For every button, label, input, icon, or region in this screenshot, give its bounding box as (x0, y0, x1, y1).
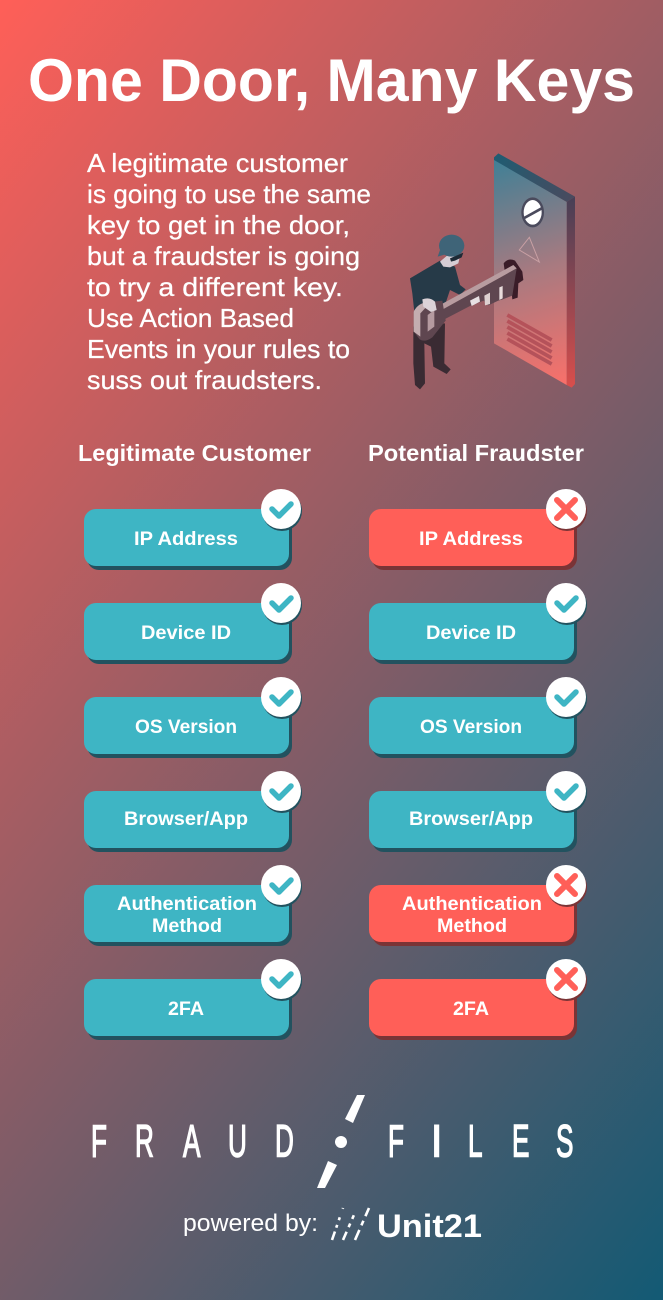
left row: Browser/App (84, 771, 302, 852)
left row: Authentication Method (84, 865, 302, 946)
intro text block: is going to use the same (87, 179, 371, 209)
left row: IP Address: IP Address (134, 529, 238, 550)
logo: Fraud Files: L (468, 1116, 483, 1166)
logo: Fraud Files: U (228, 1116, 247, 1166)
heading: Potential Fraudster: Potential Fraudster (368, 440, 584, 466)
intro text block: suss out fraudsters. (87, 365, 322, 395)
left row: Browser/App: Browser/App (124, 809, 248, 830)
heading: Legitimate Customer: Legitimate Customer (78, 440, 311, 466)
intro text block: Use Action Based (87, 303, 294, 333)
right row: IP Address (369, 489, 587, 570)
left row: IP Address (84, 489, 302, 570)
left row: Authentication Method: Authentication (117, 894, 257, 915)
left row: OS Version: OS Version (135, 717, 237, 738)
door (494, 153, 575, 388)
right row: Device ID (369, 583, 587, 664)
logo: Fraud Files: D (275, 1116, 294, 1166)
intro text block: A legitimate customer (87, 148, 348, 178)
right row: Authentication Method: Authentication (402, 894, 542, 915)
left row: Authentication Method: Method (152, 916, 222, 937)
left row: Device ID: Device ID (141, 623, 231, 644)
intro text block (87, 148, 371, 395)
intro text block: but a fraudster is going (87, 241, 360, 271)
left row: 2FA (84, 959, 302, 1040)
left row: Device ID (84, 583, 302, 664)
left row: OS Version (84, 677, 302, 758)
right row: OS Version: OS Version (420, 717, 522, 738)
powered by label: powered by: (183, 1210, 318, 1237)
logo: Fraud Files: E (512, 1116, 529, 1166)
logo: Unit21: Unit21 (377, 1208, 482, 1244)
right row: Browser/App (369, 771, 587, 852)
intro text block: to try a different key. (87, 272, 343, 302)
intro text block: Events in your rules to (87, 334, 350, 364)
right row: IP Address: IP Address (419, 529, 523, 550)
title: One Door, Many Keys (28, 47, 635, 114)
right row: Authentication Method: Method (437, 916, 507, 937)
right row: Browser/App: Browser/App (409, 809, 533, 830)
illustration: fraudster with key at door (410, 153, 575, 389)
logo: Fraud Files: A (183, 1116, 201, 1166)
intro text block: key to get in the door, (87, 210, 350, 240)
logo: Fraud Files: I (431, 1117, 442, 1167)
person and key (410, 235, 523, 389)
right row: Authentication Method (369, 865, 587, 946)
right row: 2FA (369, 959, 587, 1040)
logo: Fraud Files (91, 1095, 573, 1188)
right row: OS Version (369, 677, 587, 758)
logo: Fraud Files: S (556, 1116, 573, 1166)
logo: Unit21 (332, 1208, 482, 1244)
logo: Fraud Files: F (388, 1116, 404, 1166)
logo: Fraud Files: R (135, 1116, 154, 1166)
right row: Device ID: Device ID (426, 623, 516, 644)
left row: 2FA: 2FA (168, 999, 204, 1020)
logo: Fraud Files: F (91, 1116, 107, 1166)
right row: 2FA: 2FA (453, 999, 489, 1020)
